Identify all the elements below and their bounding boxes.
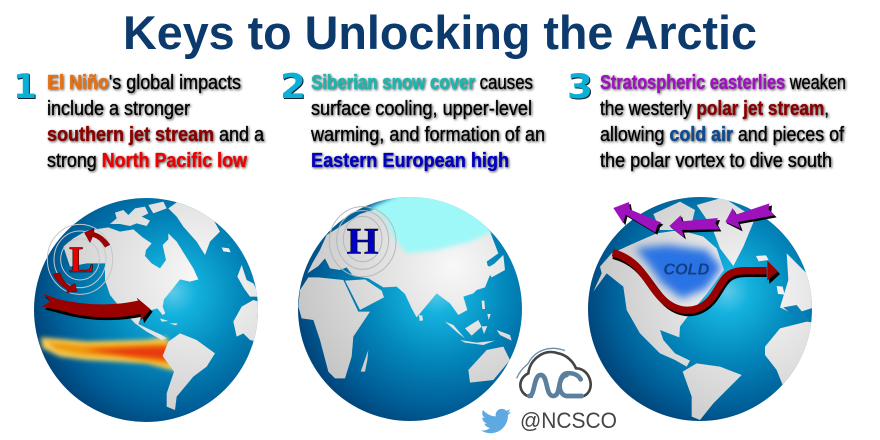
land masses (298, 195, 512, 383)
polar jet stream arrow (613, 253, 780, 313)
stratospheric easterly arrows (613, 202, 777, 239)
step 3 text block (567, 67, 846, 172)
purple arrow left (613, 202, 663, 235)
twitter bird icon (481, 409, 511, 433)
NC letters (529, 373, 582, 396)
step 2 description (310, 72, 545, 172)
cloud outline (520, 352, 591, 397)
step 3 description: allowing cold air and pieces of (600, 124, 844, 146)
step 2 description: warming, and formation of an (310, 124, 545, 146)
step 3 description (600, 72, 846, 172)
globe 3: North America with polar vortex (588, 197, 820, 421)
step 3 description: Stratospheric easterlies weaken (600, 72, 846, 94)
low pressure letter L: L (69, 240, 94, 281)
globe 2: Eurasia and Africa with snow cover (298, 190, 522, 421)
step 2 description: Siberian snow cover causes (311, 72, 533, 94)
purple arrow right (725, 203, 777, 231)
cold air mass (635, 245, 722, 298)
step 1 description: southern jet stream and a (47, 124, 265, 146)
NC cloud logo (517, 348, 591, 397)
Siberian snow cover (368, 190, 498, 253)
purple arrow middle (669, 215, 721, 239)
step 1 text block (13, 67, 265, 172)
step 1 description: strong North Pacific low (47, 150, 247, 172)
low pressure rings (47, 224, 113, 294)
step 1 description: El Niño's global impacts (47, 72, 241, 94)
step 3 description: the westerly polar jet stream, (600, 98, 829, 120)
number 3: 3 (567, 67, 593, 107)
southern jet stream arrow (42, 294, 153, 323)
COLD label: COLD (663, 262, 709, 279)
twitter handle: @NCSCO (520, 408, 617, 433)
high pressure letter H: H (347, 221, 379, 262)
Mediterranean (783, 305, 810, 322)
step 3 description: the polar vortex to dive south (600, 150, 832, 172)
step 2 description: Eastern European high (311, 150, 509, 172)
land masses (593, 197, 820, 420)
high pressure rings (329, 207, 396, 277)
step 1 description: include a stronger (47, 98, 190, 120)
step 1 description (47, 72, 265, 172)
step 2 description: surface cooling, upper-level (311, 98, 532, 120)
cyclonic circulation arrows (53, 228, 110, 293)
title: Keys to Unlocking the Arctic (123, 6, 757, 59)
El Nino warm water plume (41, 337, 177, 372)
land masses (63, 200, 263, 410)
number 2: 2 (280, 67, 306, 107)
number 1: 1 (13, 67, 37, 107)
step 2 text block (280, 67, 545, 172)
globe 1: Americas with El Nino (34, 198, 263, 422)
